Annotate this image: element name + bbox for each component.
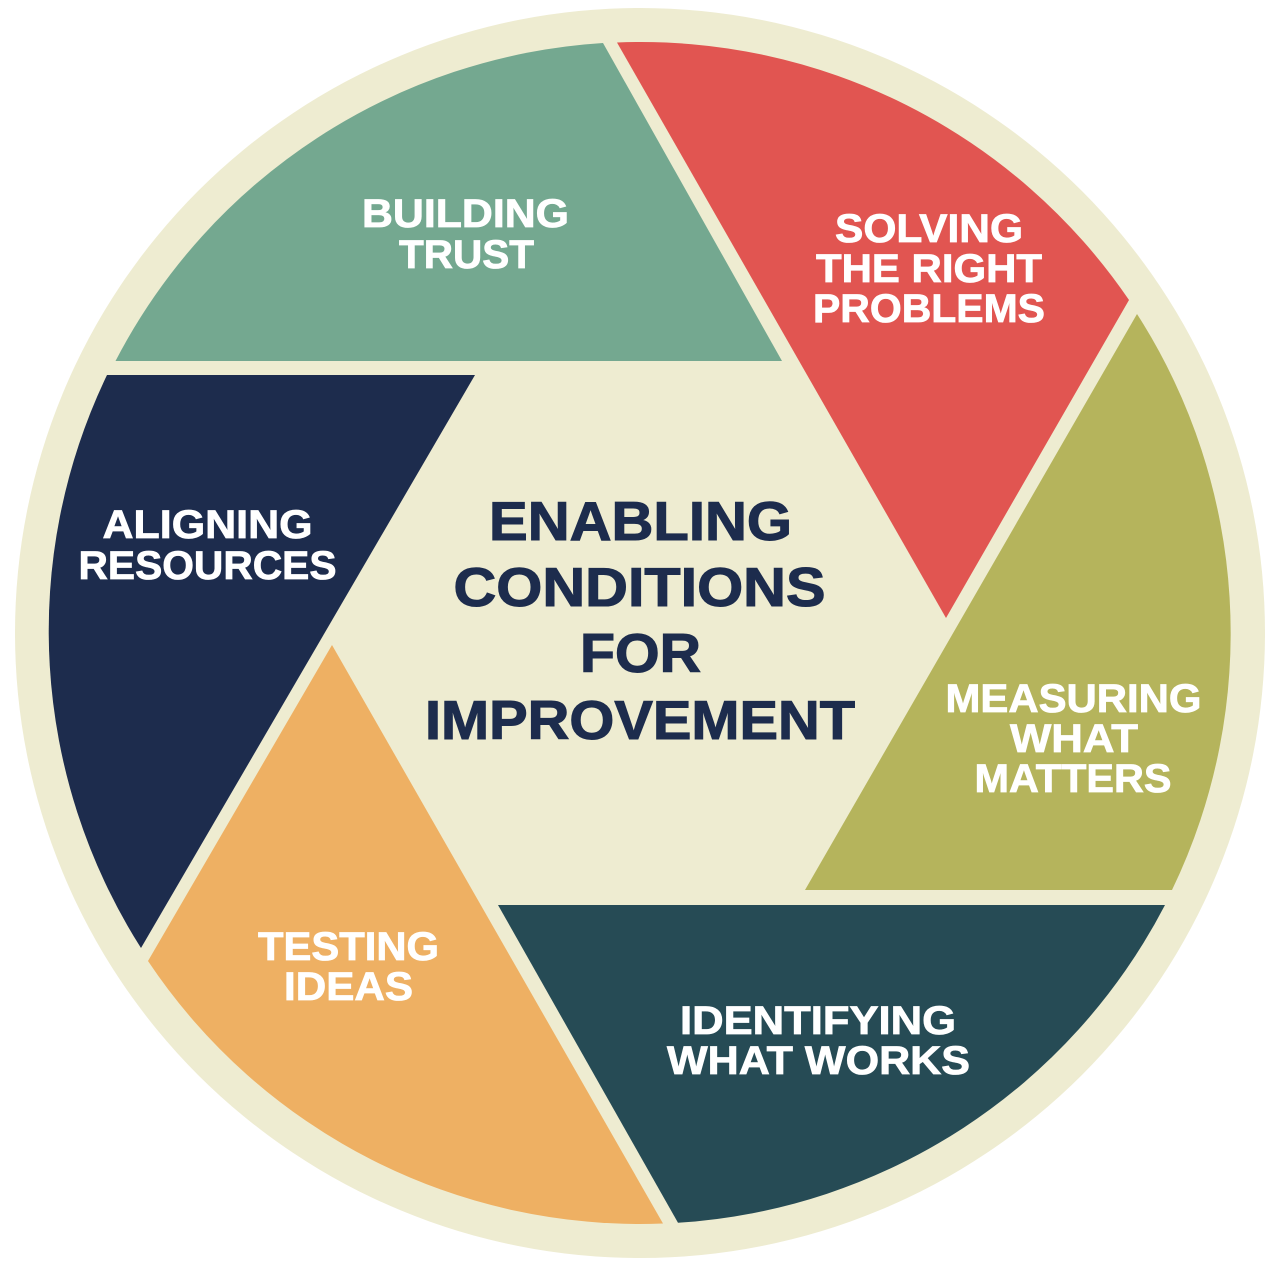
panel: testing ideas: IDEAS (284, 965, 413, 1009)
panel: building trust (116, 43, 782, 361)
panel: solving the right problems: SOLVING (835, 207, 1023, 251)
panel: aligning resources: ALIGNING (102, 503, 312, 547)
center title (425, 490, 855, 751)
center title: ENABLING (489, 490, 792, 552)
panel: identifying what works: IDENTIFYING (680, 999, 956, 1043)
panel: testing ideas (148, 645, 663, 1224)
panel: aligning resources (49, 375, 475, 948)
panel: aligning resources: RESOURCES (78, 544, 336, 588)
panel: testing ideas: TESTING (258, 925, 439, 969)
panel: identifying what works: WHAT WORKS (667, 1039, 970, 1083)
panel: building trust: TRUST (399, 233, 534, 277)
center title: CONDITIONS (454, 556, 826, 618)
center title: IMPROVEMENT (425, 689, 855, 751)
panel: identifying what works (498, 905, 1165, 1223)
center title: FOR (580, 622, 701, 684)
panel: measuring what matters: MATTERS (974, 757, 1172, 801)
panel: measuring what matters (805, 314, 1231, 890)
panel: solving the right problems (617, 42, 1129, 618)
panel: solving the right problems: THE RIGHT (816, 247, 1042, 291)
panel: building trust: BUILDING (362, 192, 569, 236)
panel: measuring what matters: WHAT (1010, 717, 1138, 761)
panel: solving the right problems: PROBLEMS (813, 287, 1045, 331)
panel: measuring what matters: MEASURING (946, 677, 1202, 721)
